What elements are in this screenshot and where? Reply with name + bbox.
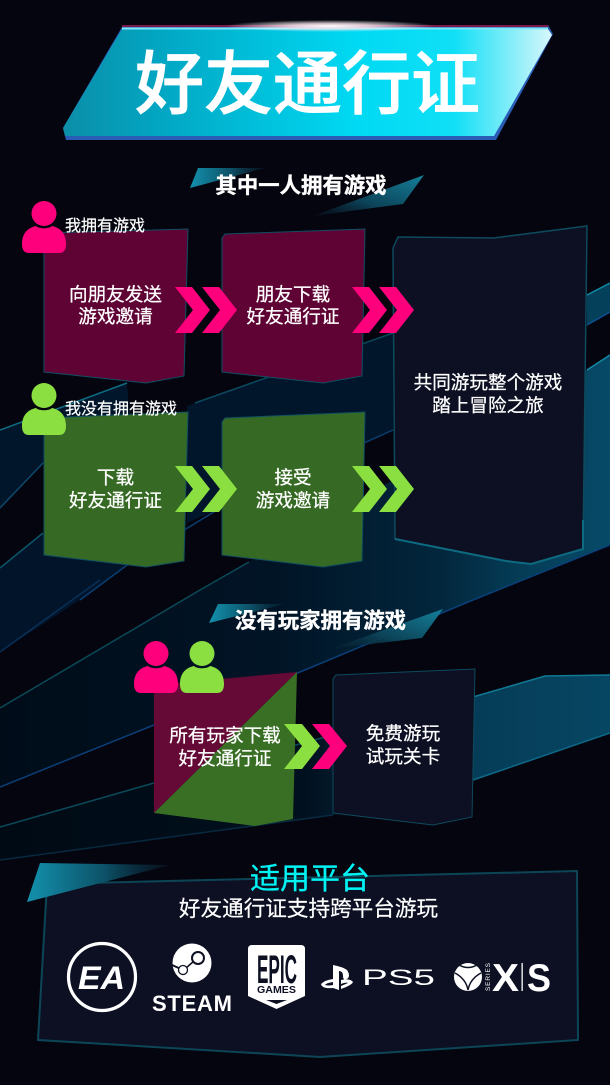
arrows: pink chevrons row 1 xyxy=(175,287,414,333)
icon: green player xyxy=(22,383,66,435)
heading: no player owns the game xyxy=(209,604,443,649)
logo: EA: EA xyxy=(78,960,125,996)
panel: supported platforms xyxy=(27,863,578,1057)
logo: PlayStation 5 xyxy=(321,965,435,990)
heading: supported platforms: 适用平台 xyxy=(250,863,370,896)
logo: Xbox Series X|S: S xyxy=(527,957,551,1000)
logo: Epic Games xyxy=(248,945,305,1009)
panel: send game invite xyxy=(44,229,188,383)
panel: accept invite: 游戏邀请 xyxy=(256,490,330,511)
panel: download pass xyxy=(44,412,188,567)
panel: friend downloads pass: 好友通行证 xyxy=(247,306,339,327)
arrows: green and pink chevrons xyxy=(284,724,347,769)
logo: Steam: STEAM xyxy=(152,991,232,1016)
title banner xyxy=(63,20,553,140)
logo: Xbox Series X|S xyxy=(454,957,551,1000)
label: I do not own the game: 我没有拥有游戏 xyxy=(65,400,177,418)
panel: friend downloads pass xyxy=(222,229,365,383)
title banner: 好友通行证 xyxy=(135,28,480,128)
logo: Epic Games: GAMES xyxy=(257,985,296,996)
panel: free trial: 免费游玩 xyxy=(366,723,441,744)
heading: one player owns the game xyxy=(190,168,424,216)
logo: EA xyxy=(68,944,136,1010)
label: I own the game: 我拥有游戏 xyxy=(65,217,145,235)
subheading: cross-platform: 好友通行证支持跨平台游玩 xyxy=(179,896,438,921)
logo: Steam xyxy=(152,944,232,1016)
panel: send game invite: 向朋友发送 xyxy=(69,284,162,305)
logo: Xbox Series X|S: SERIES xyxy=(485,962,492,991)
panel: download pass: 好友通行证 xyxy=(69,490,162,511)
logo: Epic Games: EPIC xyxy=(257,948,297,992)
panel: play together: 共同游玩整个游戏 xyxy=(414,372,562,393)
panel: accept invite: 接受 xyxy=(274,467,312,488)
arrows: green chevrons row 2 xyxy=(175,466,414,512)
heading: no player owns the game: 没有玩家拥有游戏 xyxy=(235,608,406,633)
logo: Xbox Series X|S: X xyxy=(492,957,519,1000)
panel: all players download pass xyxy=(154,672,297,826)
heading: one player owns the game: 其中一人拥有游戏 xyxy=(215,174,387,198)
panel: play together xyxy=(393,226,587,564)
panel: free trial xyxy=(333,669,475,825)
panel: friend downloads pass: 朋友下载 xyxy=(256,284,330,305)
panel: all players download pass: 好友通行证 xyxy=(179,748,271,769)
panel: all players download pass: 所有玩家下载 xyxy=(169,725,281,746)
panel: download pass: 下载 xyxy=(97,467,134,488)
panel: free trial: 试玩关卡 xyxy=(366,746,440,767)
panel: send game invite: 游戏邀请 xyxy=(78,306,153,327)
panel: play together: 踏上冒险之旅 xyxy=(432,395,544,416)
icon: pink player xyxy=(22,201,66,253)
panel: accept invite xyxy=(222,412,365,567)
icon: two players xyxy=(134,641,224,693)
logo: PlayStation 5: PS5 xyxy=(362,965,435,990)
